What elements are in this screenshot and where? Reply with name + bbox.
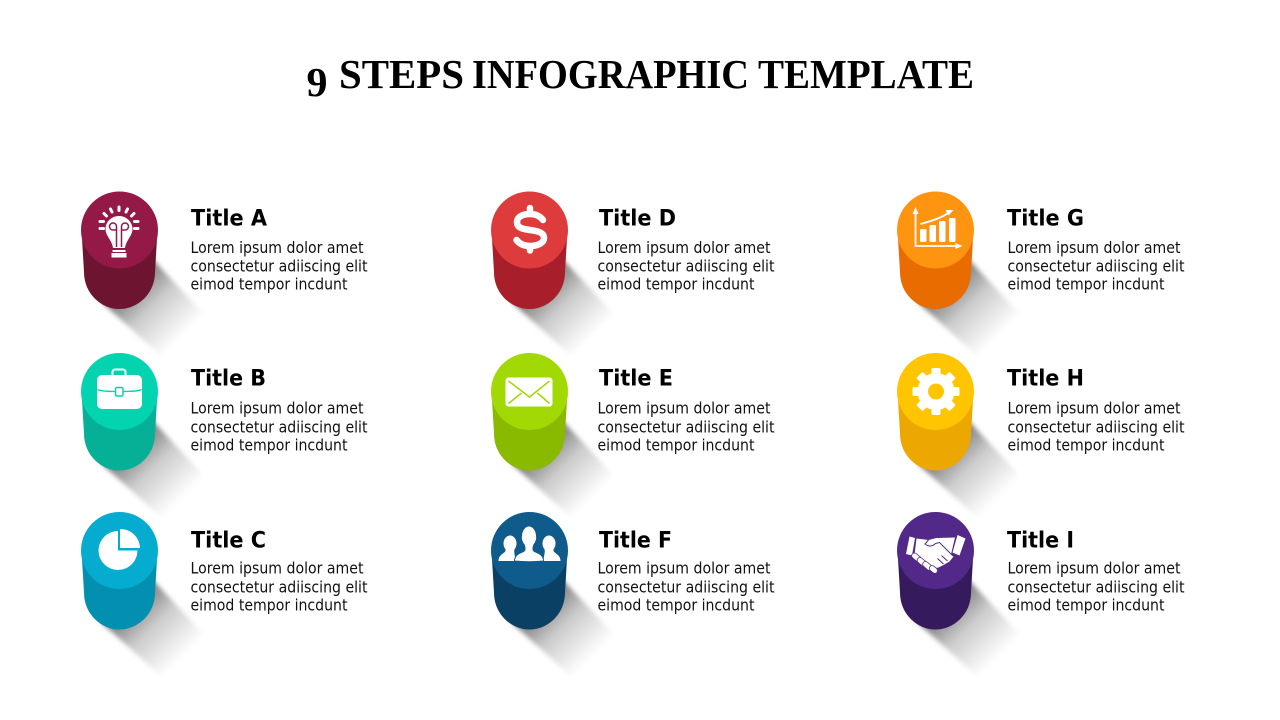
text block E: Lorem ipsum dolor amet: [598, 398, 770, 418]
text block D: eimod tempor incdunt: [598, 274, 754, 294]
text block G: consectetur adiiscing elit: [1008, 256, 1184, 276]
icon: light bulb: [100, 207, 138, 258]
panel: step H: [897, 353, 1184, 522]
cylinder H: [897, 353, 1024, 522]
panel: step A: [81, 192, 368, 360]
text block I: [1008, 558, 1184, 614]
text block G: [1008, 238, 1184, 294]
heading H: Title H: [1007, 366, 1084, 392]
text block B: Lorem ipsum dolor amet: [190, 398, 364, 418]
icon: gear: [912, 368, 960, 415]
text block C: consectetur adiiscing elit: [190, 578, 368, 596]
text block A: Lorem ipsum dolor amet: [190, 238, 364, 257]
title: 9: [306, 59, 328, 105]
cylinder B: [81, 353, 208, 522]
text block B: [190, 398, 368, 454]
text block A: [190, 238, 368, 294]
icon: pie chart: [98, 529, 140, 570]
text block C: [190, 558, 368, 614]
cylinder C: [81, 512, 208, 680]
panel: step G: [897, 192, 1184, 360]
text block I: eimod tempor incdunt: [1008, 596, 1164, 614]
text block H: [1008, 398, 1184, 454]
icon: handshake: [906, 535, 966, 575]
cylinder E: [491, 353, 618, 522]
text block E: consectetur adiiscing elit: [598, 418, 774, 436]
text block G: eimod tempor incdunt: [1008, 274, 1164, 294]
cylinder I: [897, 512, 1024, 680]
text block I: consectetur adiiscing elit: [1008, 578, 1184, 596]
text block A: eimod tempor incdunt: [190, 274, 348, 294]
panel: step F: [491, 512, 774, 680]
text block F: eimod tempor incdunt: [598, 596, 754, 614]
text block A: consectetur adiiscing elit: [190, 256, 368, 276]
text block C: Lorem ipsum dolor amet: [190, 558, 364, 578]
text block H: consectetur adiiscing elit: [1008, 418, 1184, 436]
heading A: Title A: [191, 206, 267, 232]
text block B: consectetur adiiscing elit: [190, 418, 368, 436]
text block D: [598, 238, 774, 294]
text block H: Lorem ipsum dolor amet: [1008, 398, 1180, 418]
text block E: eimod tempor incdunt: [598, 436, 754, 454]
icon: dollar sign: [516, 208, 544, 250]
heading C: Title C: [191, 528, 266, 554]
panel: step B: [81, 353, 368, 522]
text block B: eimod tempor incdunt: [190, 436, 348, 454]
heading G: Title G: [1007, 206, 1084, 232]
icon: envelope: [506, 378, 552, 406]
cylinder D: [491, 192, 618, 360]
title: STEPS: [339, 51, 464, 97]
text block C: eimod tempor incdunt: [190, 596, 348, 614]
heading F: Title F: [599, 528, 672, 554]
cylinder G: [897, 192, 1024, 360]
panel: step D: [491, 192, 774, 360]
heading B: Title B: [191, 366, 266, 392]
cylinder F: [491, 512, 618, 680]
heading E: Title E: [599, 366, 673, 392]
icon: people: [498, 526, 560, 562]
icon: briefcase: [97, 370, 142, 409]
cylinder A: [81, 192, 208, 360]
title: TEMPLATE: [758, 51, 974, 97]
text block F: consectetur adiiscing elit: [598, 578, 774, 596]
text block D: Lorem ipsum dolor amet: [598, 238, 770, 257]
text block E: [598, 398, 774, 454]
text block F: Lorem ipsum dolor amet: [598, 558, 770, 578]
panel: step C: [81, 512, 368, 680]
icon: growth chart: [912, 207, 962, 249]
text block D: consectetur adiiscing elit: [598, 256, 774, 276]
panel: step E: [491, 353, 774, 522]
panel: step I: [897, 512, 1184, 680]
title: INFOGRAPHIC: [472, 51, 749, 97]
heading D: Title D: [599, 206, 676, 232]
title: [306, 51, 974, 105]
text block H: eimod tempor incdunt: [1008, 436, 1164, 454]
text block I: Lorem ipsum dolor amet: [1008, 558, 1180, 578]
heading I: Title I: [1007, 528, 1074, 554]
text block G: Lorem ipsum dolor amet: [1008, 238, 1180, 257]
text block F: [598, 558, 774, 614]
